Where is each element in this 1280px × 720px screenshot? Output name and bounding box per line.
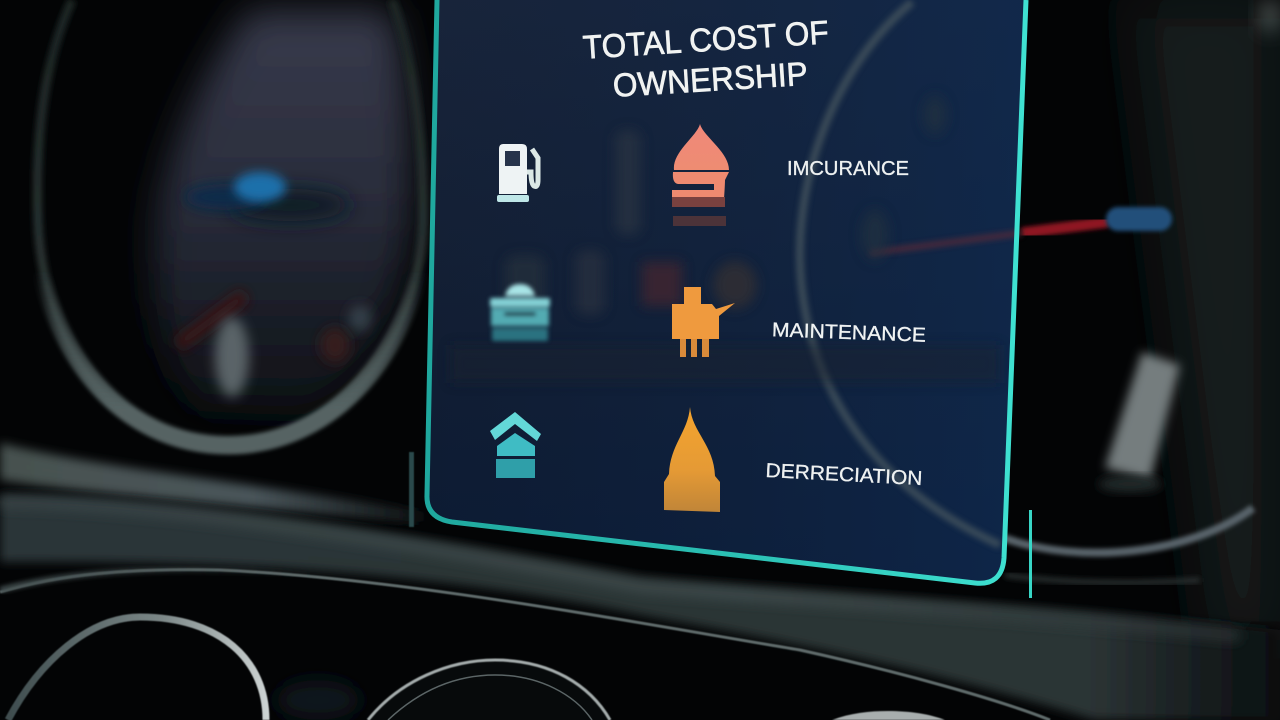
teal tick right (1029, 510, 1032, 598)
panel: glass display (427, 0, 1026, 583)
icon: maintenance (672, 287, 735, 357)
left gauge (36, 0, 425, 447)
air vent rings (8, 617, 945, 720)
label: insurance: IMCURANCE (787, 158, 909, 180)
panel border (427, 0, 1026, 583)
right gauge (1004, 207, 1253, 583)
icon: depreciation arrow (490, 412, 541, 478)
icon: insurance drop (672, 124, 729, 226)
title: OWNERSHIP (612, 55, 809, 104)
label: depreciation: DERRECIATION (765, 460, 923, 490)
teal tick left (409, 452, 414, 527)
icon: car service (490, 284, 550, 341)
title (582, 13, 832, 106)
dashboard upper trim (0, 443, 420, 522)
title: TOTAL COST OF (582, 13, 830, 66)
label: maintenance: MAINTENANCE (772, 319, 926, 347)
right side ambient glow (1130, 0, 1280, 640)
icon: fuel pump (497, 144, 538, 202)
reflected gauge details (450, 95, 1000, 383)
dashboard main trim (0, 495, 1280, 720)
icon: depreciation dome (664, 407, 720, 512)
reflected gauge arc (800, 2, 1022, 545)
